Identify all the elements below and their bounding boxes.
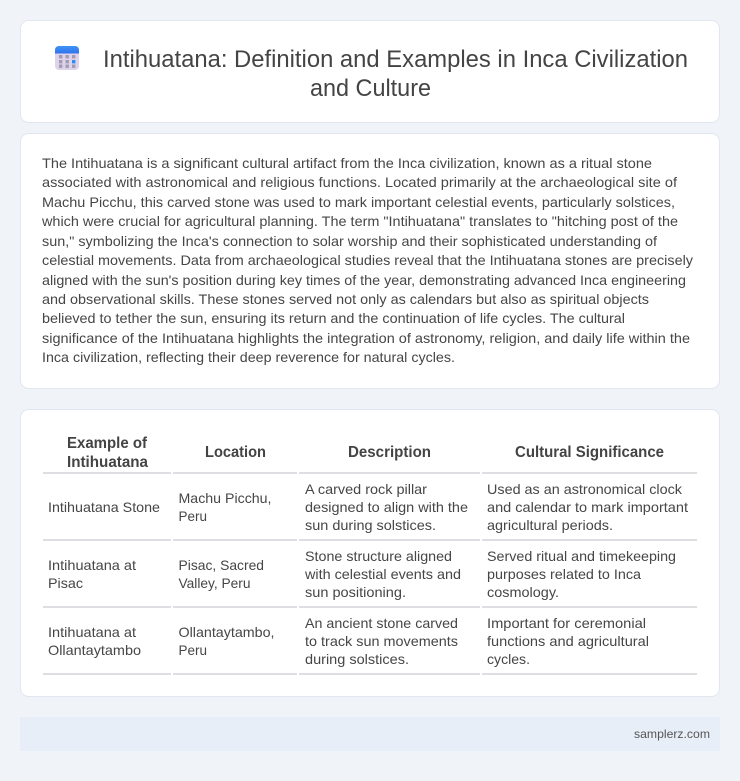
panel: title header bbox=[20, 20, 720, 122]
text block: summary paragraph: significance of the Intihuatana highlights the integration of astronomy, religion, and daily life within the bbox=[42, 330, 690, 346]
title bbox=[103, 46, 688, 102]
text block: summary paragraph: and observational skills. These stones served not only as calendars but also as spiritual objects bbox=[42, 291, 649, 307]
table row: Intihuatana Stone: agricultural periods. bbox=[487, 517, 613, 533]
text block: summary paragraph: which were crucial for agricultural planning. The term "Intihuatana" translates to "hitching post of the bbox=[41, 213, 678, 229]
panel: examples table bbox=[20, 410, 720, 696]
table row: Intihuatana Stone: Used as an astronomical clock bbox=[487, 481, 683, 497]
table row: Intihuatana Stone: Peru bbox=[178, 508, 207, 524]
table row: Intihuatana Stone: designed to align with the bbox=[305, 499, 468, 515]
table row: Intihuatana at Pisac: Intihuatana at bbox=[48, 557, 136, 573]
table row: Intihuatana at Ollantaytambo: functions and agricultural bbox=[487, 633, 649, 649]
table row: Intihuatana at Ollantaytambo: Ollantaytambo, bbox=[178, 624, 274, 640]
table row: Intihuatana at Pisac: with celestial events and bbox=[304, 566, 461, 582]
table row: Intihuatana Stone: and calendar to mark important bbox=[487, 499, 688, 515]
table row: Intihuatana at Pisac: Valley, Peru bbox=[178, 575, 250, 591]
table row: Intihuatana Stone: Intihuatana Stone bbox=[48, 499, 160, 515]
table row: Intihuatana at Pisac: Pisac bbox=[48, 575, 83, 591]
title: Intihuatana: Definition and Examples in Inca Civilization bbox=[103, 46, 688, 73]
text block: summary paragraph: sun," symbolizing the Inca's connection to solar worship and their sophisticated understanding of bbox=[42, 233, 657, 249]
table row: Intihuatana Stone: Machu Picchu, bbox=[178, 490, 272, 506]
footer credit: samplerz.com bbox=[634, 727, 710, 741]
text block: summary paragraph: Inca civilization, reflecting their deep reverence for natural cycles. bbox=[42, 349, 455, 365]
table row: Intihuatana at Pisac bbox=[48, 548, 676, 600]
table row: Intihuatana at Ollantaytambo: Ollantaytambo bbox=[48, 642, 141, 658]
table row: Intihuatana at Ollantaytambo: An ancient stone carved bbox=[305, 615, 458, 631]
text block: summary paragraph: The Intihuatana is a significant cultural artifact from the Inca civilization, known as a ritual stone bbox=[42, 155, 652, 171]
table header row: Description bbox=[348, 444, 431, 461]
table row: Intihuatana Stone: sun during solstices. bbox=[305, 517, 436, 533]
table header row bbox=[67, 435, 664, 471]
table row: Intihuatana at Ollantaytambo: Important for ceremonial bbox=[487, 615, 646, 631]
table row: Intihuatana at Pisac: cosmology. bbox=[487, 584, 559, 600]
table row: Intihuatana at Ollantaytambo: Peru bbox=[178, 642, 207, 658]
text block: summary paragraph: believed to tether the sun, ensuring its return and the continuation of life cycles. The cultural bbox=[42, 310, 625, 326]
table header row: Example of bbox=[67, 435, 148, 452]
table row: Intihuatana at Ollantaytambo bbox=[48, 615, 649, 667]
table row: Intihuatana at Pisac: purposes related to Inca bbox=[487, 566, 641, 582]
table row: Intihuatana at Pisac: sun positioning. bbox=[305, 584, 406, 600]
text block: summary paragraph: associated with astronomical and religious functions. Located primarily at the archaeological site of bbox=[42, 174, 677, 190]
title: and Culture bbox=[310, 75, 431, 102]
footer bar bbox=[20, 717, 720, 751]
table header row: Intihuatana bbox=[67, 454, 148, 471]
text block: summary paragraph: aligned with the sun's position during key times of the year, demonstrating advanced Inca engineering bbox=[42, 272, 686, 288]
panel: summary text bbox=[20, 134, 720, 388]
table row: Intihuatana at Ollantaytambo: Intihuatana at bbox=[48, 624, 136, 640]
table row: Intihuatana Stone bbox=[48, 481, 688, 533]
table row: Intihuatana at Ollantaytambo: to track sun movements bbox=[305, 633, 458, 649]
text block: summary paragraph bbox=[41, 155, 693, 365]
table row: Intihuatana at Pisac: Served ritual and timekeeping bbox=[487, 548, 676, 564]
table row: Intihuatana Stone: A carved rock pillar bbox=[305, 481, 427, 497]
icon: calendar bbox=[55, 46, 79, 70]
table row: Intihuatana at Pisac: Pisac, Sacred bbox=[178, 557, 264, 573]
table row: Intihuatana at Pisac: Stone structure aligned bbox=[305, 548, 452, 564]
text block: summary paragraph: Machu Picchu, this carved stone was used to mark important celestial events, particularly solstices, bbox=[42, 194, 675, 210]
text block: summary paragraph: celestial movements. Data from archaeological studies reveal that the Intihuatana stones are precisely bbox=[42, 252, 693, 268]
table header row: Location bbox=[205, 444, 266, 461]
table row: Intihuatana at Ollantaytambo: cycles. bbox=[487, 651, 530, 667]
table header row: Cultural Significance bbox=[515, 444, 664, 461]
table row: Intihuatana at Ollantaytambo: during solstices. bbox=[305, 651, 409, 667]
